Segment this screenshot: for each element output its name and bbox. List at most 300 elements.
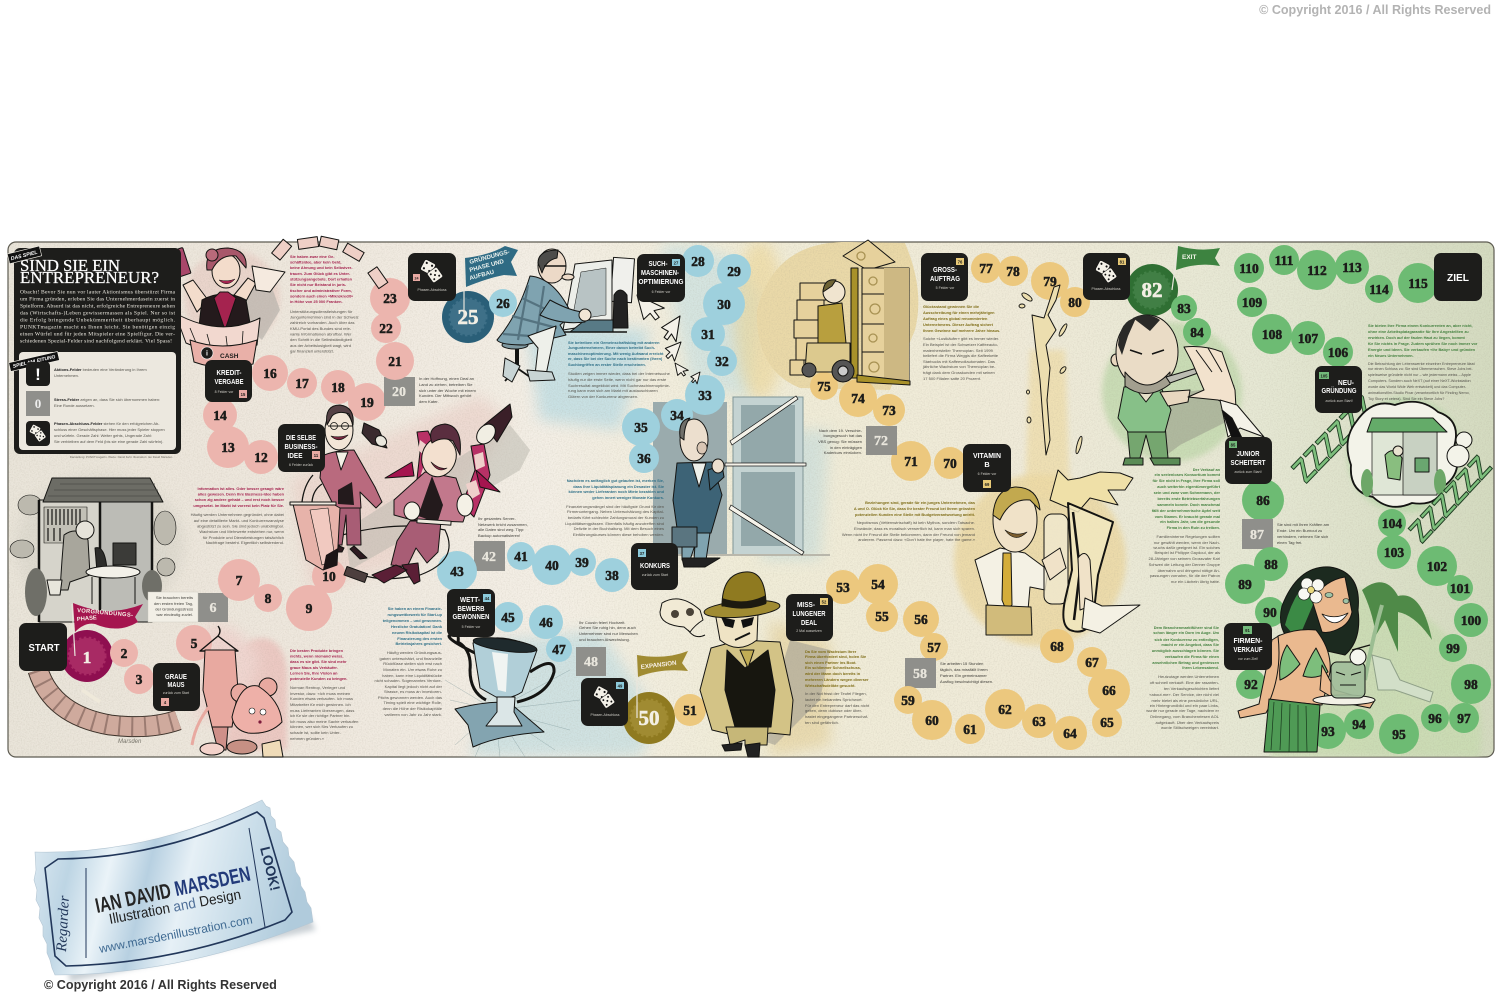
text: Kreditvergabe: gar finanziell unterstützt. — [290, 348, 334, 354]
text: Misslungener Deal: hastet eingegangene Partnerschaf- — [805, 714, 869, 719]
box: Konkurs: KONKURS — [640, 561, 670, 570]
box: Misslungener Deal: LUNGENER — [792, 609, 826, 618]
box: Phasen-Abschluss 24 — [408, 253, 456, 301]
field 58 — [905, 658, 936, 688]
eyes — [249, 708, 255, 714]
text: Junior scheitert: passungen vornahm, für die der Patron — [1150, 573, 1220, 578]
eyes — [1325, 592, 1333, 598]
field 82 — [1126, 264, 1178, 316]
text: Die selbe Business-Idee — [191, 486, 285, 545]
field 16: 16 — [263, 366, 277, 381]
right door frame — [733, 397, 803, 555]
field 39: 39 — [575, 555, 589, 570]
sweater — [1118, 385, 1171, 432]
field 34: 34 — [670, 408, 684, 423]
box: Vitamin B: 6 Felder vor — [978, 472, 997, 476]
white inner panel — [19, 352, 176, 450]
text: field 6 note — [148, 592, 198, 622]
field 97 — [1449, 703, 1479, 733]
field 50 — [623, 692, 675, 744]
man shirt — [975, 548, 1048, 612]
credit line: Darstellung: PUNKTmagazin. Werte: David Fehr. Illustration: Ian David Marsden. — [70, 455, 173, 459]
roof slats — [48, 484, 161, 496]
head — [715, 612, 758, 648]
text: field 72 note: VBS genug: Sie müssen — [818, 439, 862, 444]
field 99: 99 — [1446, 641, 1460, 656]
text: Grossauftrag: matenhersteller Thermoplan. Seit 1999 — [923, 348, 994, 353]
robot toy — [613, 290, 628, 328]
field 30: 30 — [717, 297, 731, 312]
text: Junior scheitert: Der Verkauf an — [1193, 467, 1221, 472]
trunk — [1365, 605, 1382, 680]
text: Suchmaschinenoptimierung: Studien zeigen immer wieder, dass bei der Internetsuche — [568, 371, 671, 376]
text: Firmenverkauf: unmöglich ausschlagen können. Sie — [1152, 648, 1220, 653]
box: Graue Maus: zurück zum Start — [163, 691, 189, 695]
ticket inner border — [45, 812, 292, 966]
field 53: 53 — [836, 580, 850, 595]
field 47: 47 — [552, 642, 566, 657]
illustration: forklift and boxes — [790, 240, 910, 385]
illustration: sleeping Z band: ZZZZZZ — [1284, 388, 1383, 489]
box: Kreditvergabe: KREDIT- — [216, 368, 242, 377]
box: Suchmaschinenoptimierung: MASCHINEN- — [641, 268, 679, 277]
text: Neugründung: Toy Story et cetera). Sind Sie ein Steve Jobs? — [1368, 397, 1444, 401]
field 22: 22 — [379, 321, 393, 336]
drops — [1019, 292, 1083, 454]
box: Firmenverkauf: VERKAUF — [1234, 645, 1263, 654]
field 55: 55 — [875, 609, 889, 624]
posts — [39, 500, 152, 622]
text: Firmenverkauf: aufgekauft. Über den Verkaufspreis — [1156, 720, 1219, 725]
text: Grossauftrag: beliefert die Firma Weggis die Kaffeekette — [923, 353, 999, 358]
board paper background — [8, 242, 1494, 757]
illustration: flying banknotes — [272, 236, 388, 289]
field 65 — [1092, 707, 1122, 737]
legend: phase end icon — [26, 421, 50, 446]
podium man jacket — [320, 450, 382, 508]
field 43 — [437, 551, 477, 591]
flag: Exit: EXIT — [1182, 254, 1196, 261]
box: Suchmaschinenoptimierung: SUCH- — [648, 259, 668, 268]
dress — [203, 650, 238, 727]
field 10: 10 — [322, 569, 336, 584]
bucket — [47, 580, 62, 595]
legend: stress field text: zeigen an, dass Sie sich übernommen haben: — [79, 397, 160, 402]
thought cloud with sleeping hut — [1347, 402, 1472, 507]
cash label: i — [206, 350, 208, 358]
text: Grossauftrag: Auftrag eines global renommierten — [923, 316, 988, 321]
copyright notice bottom: © Copyright 2016 / All Rights Reserved — [44, 978, 277, 992]
smile — [1322, 613, 1348, 623]
box: Misslungener Deal: DEAL — [801, 618, 817, 627]
field 18: 18 — [331, 380, 345, 395]
text: Firmenverkauf: ein Hintergrundbild und ein paar Links, — [1150, 703, 1219, 708]
tiki face — [1336, 672, 1361, 685]
text: Konkurs: Nachdem es anfänglich gut gelaufen ist, merken Sie, — [567, 478, 664, 483]
field 106 — [1323, 337, 1353, 367]
text: Die selbe Business-Idee: Häufig werden Unternehmen gegründet, ohne dabei — [191, 512, 284, 517]
text: field 42 note: Backup automatisieren! — [478, 533, 520, 538]
person — [60, 531, 90, 590]
field 12 — [244, 440, 278, 474]
field 99 — [1439, 634, 1467, 662]
flag: Vorgründungsphase: PHASE — [77, 615, 97, 623]
field 84 — [1183, 318, 1211, 346]
field 5 — [176, 625, 212, 661]
text: Die selbe Business-Idee: alles gewesen. Denn Ihre Business-Idee haben — [198, 492, 285, 496]
legend: phase end text: schluss einer Geschäftsphase. Hier muss jeder Spieler stoppen — [54, 427, 165, 432]
skirt strands — [1271, 702, 1307, 752]
field 72: 72 — [874, 434, 888, 449]
box: Phasen-Abschluss 24: 24 — [414, 276, 418, 280]
intro text: Spielform. Absurd ist das nicht, erfolgreiche Entrepreneure sehen — [20, 302, 175, 310]
key — [1166, 368, 1198, 383]
text: Misslungener Deal: wird der Mann doch bereits in — [804, 671, 861, 676]
box: Grossauftrag: 76 — [958, 260, 963, 264]
field 29: 29 — [727, 264, 741, 279]
field 17 — [287, 368, 317, 398]
field 95 — [1379, 714, 1419, 754]
rocket man hair — [431, 424, 460, 455]
spotlight left — [362, 423, 389, 449]
box: Neugründung: 105 — [1320, 374, 1328, 378]
smoke trail — [688, 630, 705, 637]
paper grain — [8, 242, 1494, 757]
podium man legs — [334, 505, 361, 545]
text: field 20 note: In der Hoffnung, einen Deal an — [419, 376, 474, 381]
tag: Das Spiel: DAS SPIEL — [10, 250, 38, 262]
text: Neugründung: Energie und Ideen. Sie verkaufen «Ihr Baby» und gründen — [1368, 347, 1476, 352]
text: Junior scheitert: nur gewählt werden, wenn der Nach- — [1154, 540, 1221, 545]
text: Kreditvergabe: aus der Arbeitslosigkeit wagt, wird — [290, 343, 351, 348]
skull eyes — [671, 610, 679, 618]
box: Start — [19, 623, 67, 671]
text: Junior scheitert: fällt der unternehmerische Apfel weit — [1152, 508, 1221, 513]
text: Grossauftrag: Ein Beispiel ist der Schweizer Kaffeeauto- — [923, 342, 999, 347]
box: Suchmaschinenoptimierung: 6 Felder vor — [652, 290, 671, 294]
coat — [700, 640, 793, 738]
text: field 20 note: sich unter der Woche mit einem — [419, 388, 476, 393]
text: Wettbewerb: Häufig werden Gründungsaus- — [387, 650, 443, 655]
box: Neugründung: zurück zum Start! — [1325, 399, 1353, 403]
text: Junior scheitert: nur ein Lächeln übrig hatte. — [1171, 579, 1220, 584]
box: Konkurs — [631, 543, 678, 590]
forks — [857, 375, 910, 385]
field 54: 54 — [871, 577, 885, 592]
glass small — [1044, 514, 1068, 604]
heading — [20, 256, 159, 287]
left door panel — [653, 402, 727, 555]
legend: action field text: Aktions-Felder — [54, 367, 82, 372]
field 56: 56 — [914, 612, 928, 627]
text: Grossauftrag: Unternehmens. Dieser Auftrag sichert — [923, 322, 994, 327]
illustration: skull-shaped smoke — [660, 599, 705, 637]
text: field 20 note: Kunden. Der Mittwoch gehört — [419, 393, 472, 398]
hair — [538, 250, 558, 273]
field 41 — [507, 542, 535, 570]
text: Kreditvergabe: keine Ahnung und kein Selbstver- — [290, 265, 353, 270]
field 109: 109 — [1242, 295, 1262, 310]
text: Wettbewerb: Timing spielt eine wichtige Rolle, — [383, 700, 442, 705]
glass large — [1063, 503, 1113, 632]
text: Junior scheitert: für Sie nicht in Frage, Ihre Firma soll — [1153, 478, 1220, 483]
text: Graue Maus: muss Lieferanten überzeugen, dass — [290, 708, 354, 713]
hair top — [1118, 315, 1160, 355]
text: Kreditvergabe: Jungunternehmen sind in der Schweiz — [290, 314, 359, 320]
shadow — [240, 282, 280, 340]
field 90 — [1255, 597, 1285, 627]
text: Misslungener Deal: lautet ein bekanntes Sprichwort. — [805, 697, 863, 702]
rocket man legs — [391, 521, 441, 567]
desk monitor — [1415, 458, 1429, 472]
legs — [682, 533, 710, 560]
text: Junior scheitert: ein seelenloses Konsortium kommt — [1154, 472, 1221, 477]
text: Junior scheitert: ein halbes Jahr, um die gesunde — [1160, 519, 1221, 524]
field 107: 107 — [1298, 331, 1318, 346]
field 83: 83 — [1177, 301, 1191, 316]
box: Grossauftrag: GROSS- — [933, 265, 957, 274]
legend: action field icon: ! — [35, 365, 41, 384]
shoes — [722, 743, 760, 757]
text: Vitamin B — [842, 500, 976, 542]
box: Die selbe Business-Idee: IDEE — [288, 451, 303, 460]
rocket man mouth — [431, 462, 447, 470]
flag: Gründungsphase und Aufbau — [464, 246, 518, 318]
coat — [673, 462, 722, 535]
box: Kreditvergabe: VERGABE — [214, 377, 244, 386]
intro text: schiedenen Spezial-Felder sind nachfolgend erklärt. Viel Spass! — [20, 338, 172, 344]
desk — [86, 566, 140, 578]
text: Junior scheitert — [1148, 467, 1221, 584]
box: Firmenverkauf — [1224, 623, 1272, 670]
box: Phasen-Abschluss 49: Phasen-Abschluss — [590, 713, 620, 717]
box: Vitamin B: B — [984, 460, 990, 469]
text: Firmenverkauf: «about.me». Der Service, der nicht viel — [1149, 692, 1219, 697]
podium man smile — [331, 435, 348, 440]
field 25 — [442, 291, 494, 343]
text: Junior scheitert: Firma in den Ruin zu treiben. — [1167, 525, 1220, 530]
hand — [579, 309, 591, 321]
text: Firmenverkauf: ten Verkaufsgeschichten liefert — [1164, 686, 1220, 691]
large hand — [1184, 347, 1236, 408]
field 48 — [576, 647, 606, 676]
field 59 — [894, 686, 922, 714]
field 68: 68 — [1050, 639, 1064, 654]
text: field 72 note: in den einträgigen — [830, 445, 862, 450]
cigar — [735, 633, 750, 640]
text: field 87 note: Sie sind mit Ihren Kräften am — [1277, 522, 1330, 527]
field 74 — [839, 379, 877, 417]
text: Konkurs — [565, 478, 665, 537]
field 7 — [218, 559, 260, 601]
text: Wettbewerb: Pitchs gewonnen werden. Auch das — [378, 695, 442, 700]
rocket man hands — [404, 502, 420, 520]
text: Junior scheitert: Familieninterne Regelungen sollten — [1157, 534, 1220, 539]
field 110: 110 — [1239, 261, 1259, 276]
field 10 — [312, 559, 346, 593]
bookshelf — [44, 507, 87, 543]
field 104: 104 — [1382, 516, 1402, 531]
field 13 — [207, 426, 249, 468]
field 77: 77 — [979, 261, 993, 276]
field 26 — [489, 289, 517, 317]
illustration: hula girl with cocktail — [1238, 567, 1375, 752]
podium man hair — [327, 405, 353, 425]
field 86 — [1242, 479, 1284, 521]
field 73: 73 — [882, 403, 896, 418]
signature: Marsden — [118, 739, 142, 745]
text: Graue Maus: können, wer sich fürs Verkaufen zu — [290, 724, 353, 729]
rocket man jacket — [394, 472, 467, 522]
text: Wettbewerb: neuem Risikokapital ist die — [392, 630, 443, 635]
field 30 — [703, 283, 745, 325]
field 53 — [826, 570, 860, 604]
track: phase 3 fields (yellow) — [623, 253, 1130, 750]
flag: Vorgründungsphase: VORGRÜNDUNGS- — [77, 607, 133, 619]
text: Graue Maus: Lernen Sie, Ihre Vision an — [290, 670, 338, 676]
field 104 — [1378, 509, 1406, 537]
glasses — [544, 265, 566, 267]
text: Die selbe Business-Idee: umgesetzt. Im Markt ist vorerst kein Platz für Sie. — [193, 503, 284, 508]
box: Kreditvergabe: 15 — [241, 392, 246, 397]
tail — [192, 700, 215, 745]
tag: Das Spiel — [7, 246, 42, 264]
text: Wettbewerb: Herzliche Gratulation! Dank — [391, 624, 443, 629]
slipper — [527, 370, 555, 381]
torso — [1270, 630, 1330, 705]
field 100 — [1454, 603, 1488, 637]
splash top — [1050, 470, 1133, 512]
hair — [680, 418, 690, 440]
text: Suchmaschinenoptimierung: Suchresultat angeklickt wird. Mit Suchmaschinenoptimie- — [568, 383, 671, 388]
field 60 — [912, 700, 952, 740]
box: Die selbe Business-Idee — [278, 424, 325, 472]
text: Misslungener Deal: In der Not frisst der Teufel Fliegen, — [805, 691, 867, 696]
text: Konkurs: gehen innert weniger Monate Konkurs. — [592, 495, 664, 500]
text: Junior scheitert: wuchs dafür geeignet ist. Ein solches — [1153, 545, 1220, 550]
field 41: 41 — [514, 549, 528, 564]
field 5: 5 — [191, 636, 198, 651]
collar — [1135, 388, 1157, 402]
box: Kreditvergabe: 8 Felder vor — [215, 390, 234, 394]
legend: action field icon — [26, 362, 50, 386]
arm left — [1238, 635, 1280, 718]
text: Konkurs: können weder Lieferanten noch Miete bezahlen und — [568, 489, 665, 494]
field 32: 32 — [715, 354, 729, 369]
text: Kreditvergabe: KMU-Portal des Bundes sind rele- — [290, 326, 352, 331]
intro text: Obacht! Bevor Sie nun vor lauter Aktionismus überstürzt Firma — [20, 290, 176, 296]
box: Junior scheitert: 85 — [1231, 442, 1236, 448]
field 64 — [1053, 716, 1087, 750]
field 28: 28 — [691, 254, 705, 269]
box: Die selbe Business-Idee: DIE SELBE — [286, 433, 316, 442]
text: field 42 note: alle Daten sind weg. Tipp: — [478, 527, 524, 532]
illustration: worm tunnel — [38, 670, 178, 745]
field 106: 106 — [1328, 345, 1348, 360]
text: Wettbewerb: gaben unterschätzt, und finanzielle — [379, 656, 443, 661]
field 114 — [1365, 275, 1393, 303]
arm — [1160, 390, 1190, 406]
illustration: programmer at computer — [497, 249, 635, 382]
legend: phase end text: stehen für den erfolgreichen Ab- — [102, 421, 160, 426]
driver head — [823, 281, 845, 303]
eyes — [1130, 350, 1164, 354]
rocket man shoes — [372, 563, 420, 584]
text: Vitamin B: A und O. Glück für Sie, dass Ihr bester Freund bei Ihrem grössten — [854, 506, 976, 511]
straw — [1352, 645, 1370, 650]
field 42 — [474, 541, 505, 571]
hat brim — [703, 598, 781, 620]
box: Wettbewerb gewonnen — [447, 589, 495, 637]
copyright notice top: © Copyright 2016 / All Rights Reserved — [1259, 3, 1491, 17]
flag: Exit — [1172, 245, 1220, 290]
text: Junior scheitert: 28-Jähriger von seinem Grossvater Karl — [1148, 556, 1220, 561]
box: Neugründung — [1315, 366, 1362, 413]
text: Wettbewerb: haben, kann eine Liquiditätslücke — [382, 673, 443, 678]
text: Wettbewerb: Sie haben an einem Finanzie- — [388, 606, 443, 611]
spiral labels — [857, 252, 880, 372]
field 33: 33 — [698, 388, 712, 403]
field 80 — [1060, 287, 1090, 317]
stem — [486, 697, 522, 726]
text: field 72 note: Nach dem 19. Verschie- — [819, 428, 863, 433]
field 2: 2 — [121, 646, 128, 661]
field 89: 89 — [1238, 577, 1252, 592]
field 110 — [1234, 253, 1264, 283]
field 54 — [858, 564, 898, 604]
field 82: 82 — [1142, 278, 1162, 302]
podium man head — [325, 410, 353, 450]
stage ellipse — [342, 526, 449, 579]
box: Ziel — [1434, 253, 1482, 301]
text: Neugründung: spielsweise gründete nicht nur – wie jedermann weiss – Apple — [1368, 373, 1471, 377]
text: Junior scheitert: bereits erste Betriebserfahrungen — [1158, 496, 1221, 501]
text: Grossauftrag: Glücksstand gewinnen Sie die — [923, 304, 980, 309]
sleeve dark — [1222, 410, 1242, 438]
cloud — [1347, 402, 1457, 507]
hut walls — [1372, 425, 1437, 495]
shadow — [1160, 385, 1235, 460]
text: Junior scheitert: auch weiterhin eigentümergeführt — [1157, 484, 1221, 489]
field 59: 59 — [901, 693, 915, 708]
tag: Spielanleitung: SPIELANLEITUNG — [12, 354, 56, 370]
field 1: 1 — [83, 648, 91, 667]
text: Wettbewerb: Strasse, es muss an Investoren- — [384, 689, 443, 694]
field 115 — [1398, 263, 1438, 303]
rocket fins — [385, 462, 414, 478]
text: Suchmaschinenoptimierung: Sie betreiben ein Gemeinschaftsblog mit anderen — [568, 340, 660, 345]
flag: Gründungsphase und Aufbau: AUFBAU — [469, 270, 495, 282]
text: Neugründung: Die Betrachtung der Lebenswerke einzelner Entrepreneure lässt — [1368, 362, 1476, 366]
intro text: PUNKTmagazin macht es Ihnen leicht. Sie benötigen einzig — [20, 324, 175, 330]
foot 2 — [503, 358, 520, 382]
subtitle: Illustration and Design — [108, 887, 242, 928]
box: Kreditvergabe — [205, 360, 252, 402]
field 70: 70 — [943, 456, 957, 471]
text: field 58 note: Partner. Ein gemeinsamer — [940, 673, 987, 678]
spotlight right — [473, 404, 512, 448]
shoes — [682, 558, 720, 567]
box: Neugründung: GRÜNDUNG — [1322, 386, 1357, 395]
handles — [449, 634, 554, 702]
rays — [445, 640, 580, 757]
left box stack — [790, 283, 826, 375]
wheels — [832, 360, 854, 382]
field 18 — [321, 370, 355, 404]
legend: action field text: Unternehmen. — [54, 373, 79, 378]
illustration: beer splash and toast — [975, 285, 1140, 635]
field 80: 80 — [1068, 295, 1082, 310]
